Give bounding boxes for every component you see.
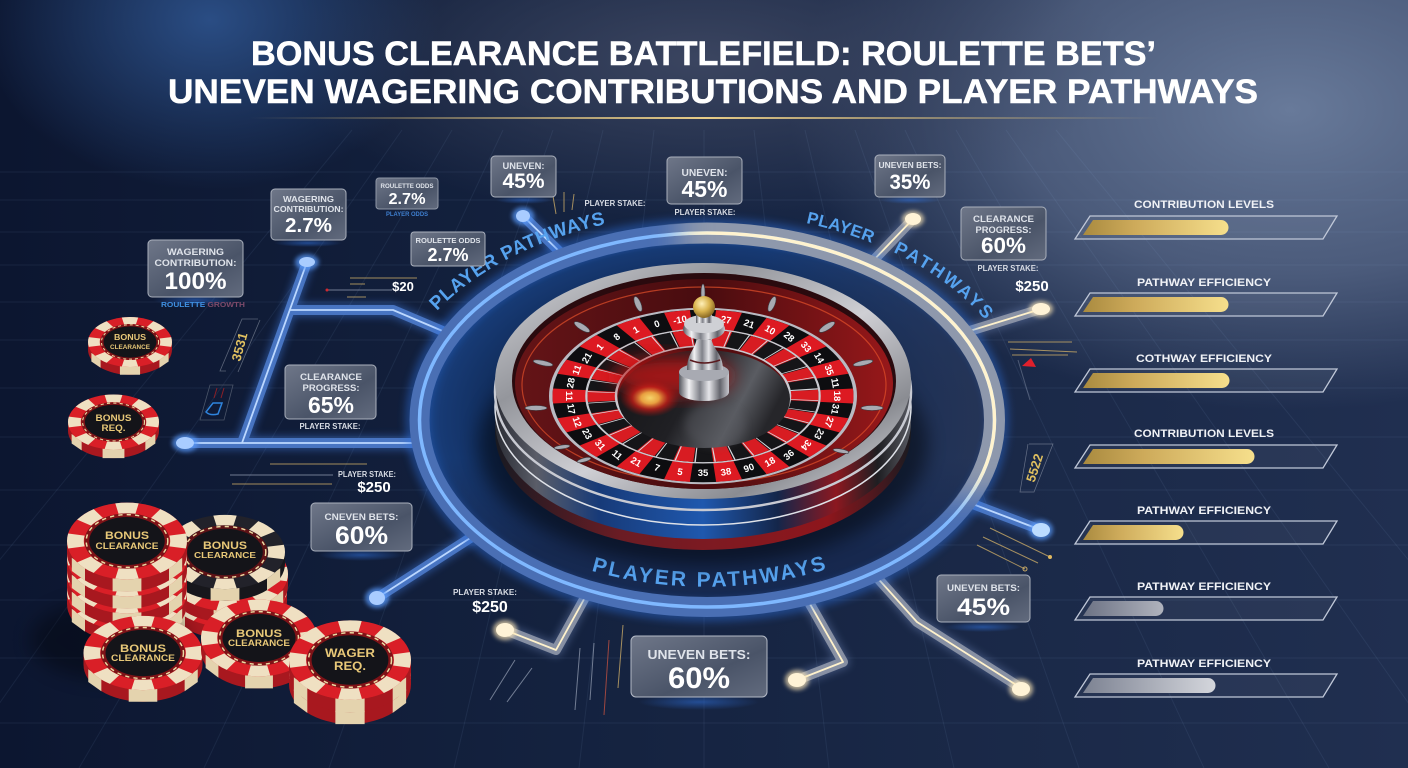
vertical figure 3531 [220,319,260,372]
wheel numbers: 18 [831,391,842,401]
panel: clearance progress 60%: 60% [981,233,1026,258]
bar: pathway efficiency 2 [1075,505,1337,544]
bar: contribution levels 2 [1075,428,1337,468]
panel: roulette odds 2.7%: 2.7% [428,245,468,265]
panel: roulette odds 2.7% [411,232,485,266]
wheel numbers: 34 [798,437,813,453]
connector node glows [172,207,1053,699]
panel: clearance progress 60%: PROGRESS: [976,225,1032,236]
panel: uneven bets 35% [875,155,945,204]
wheel numbers: 11 [609,448,625,463]
chip: wager req: WAGER [325,646,375,660]
wheel numbers: 18 [763,455,778,470]
label: player stake $250 right: $250 [1015,278,1049,295]
spindle [679,296,729,401]
label: player stake $250 left [338,470,396,496]
wheel numbers: 17 [564,403,577,415]
bar: pathway efficiency 1 [1075,277,1337,316]
chip stack: red: CLEARANCE [96,541,158,551]
bar: pathway efficiency 4 [1075,658,1337,697]
wheel numbers: 21 [742,317,756,332]
wheel numbers: 31 [828,403,841,416]
ring label: pathways upper right: PATHWAYS [894,242,992,318]
bowl ticks [525,284,883,464]
label: $20: $20 [392,279,414,294]
bar: pathway efficiency 3: PATHWAY EFFICIENCY [1137,581,1272,593]
wheel numbers: 38 [720,466,732,479]
panel: wagering contribution 100%: 100% [164,268,226,295]
label: player stake $250 right: PLAYER STAKE: [978,264,1038,273]
panel: wagering contribution 2.7% [271,189,346,247]
small chip: bonus req: REQ. [102,423,126,433]
bar: cothway efficiency [1075,353,1337,392]
panel: clearance progress 60% [961,207,1046,260]
glowing ball [620,379,680,417]
ring label: player pathways bottom: PLAYER PATHWAYS [592,556,825,587]
panel: uneven 45% [491,156,556,204]
title [168,35,1258,111]
label: player stake $250 bottom: PLAYER STAKE: [453,588,517,597]
panel: uneven bets 35%: 35% [890,171,931,194]
wheel numbers: 21 [580,350,595,366]
title: UNEVEN WAGERING CONTRIBUTIONS AND PLAYER PATHWAYS [168,73,1258,111]
number track [551,309,855,483]
panel: uneven bets 60% left: 60% [335,522,388,550]
label: player stake $250 bottom [453,588,517,616]
panel: uneven 45% centre: UNEVEN: [682,168,728,179]
blue and cream node dots [176,210,1050,696]
chip stack: black over red: BONUS [203,540,247,552]
bar: contribution levels 1: CONTRIBUTION LEVELS [1134,199,1274,211]
roulette wheel [478,263,928,565]
label: player stake $250 left: PLAYER STAKE: [338,470,396,479]
chip stack: red: BONUS [105,530,149,542]
label: player stake $250 left: $250 [357,479,391,496]
wheel numbers: 35 [698,468,709,479]
panel: clearance progress 65%: 65% [308,392,354,418]
wheel numbers: 35 [822,363,836,378]
panel: uneven bets 60% bottom [631,636,767,710]
panel: uneven bets 45% right [937,575,1030,632]
wheel numbers: 7 [652,462,661,475]
small chip: bonus req: BONUS [96,413,132,423]
panel: clearance progress 65% [285,365,376,419]
panel: uneven 45%: UNEVEN: [502,161,544,171]
panel: wagering contribution 100% [148,240,243,306]
label: player stake top: PLAYER STAKE: [584,199,646,208]
chip stack: black over red [164,514,289,639]
wheel base [495,274,911,550]
label: player stake $250 right [978,264,1049,295]
wheel numbers: 1 [631,324,642,337]
wheel numbers: 12 [570,415,584,429]
small blue and red icon [200,385,233,420]
chip: wager req: REQ. [334,659,366,673]
wheel numbers: 21 [628,455,644,470]
panel: uneven bets 60% left [311,503,412,561]
chip: wager req [288,620,412,724]
panel: uneven bets 60% left: CNEVEN BETS: [324,512,398,523]
panel: uneven bets 60% bottom: 60% [668,662,730,695]
panel: wagering contribution 100%: WAGERING [167,247,224,258]
bar: pathway efficiency 4: PATHWAY EFFICIENCY [1137,658,1272,670]
panel: clearance progress 65%: PROGRESS: [302,383,360,394]
panel: clearance progress 65%: CLEARANCE [300,372,362,383]
wheel numbers: 11 [828,377,841,390]
red marker [1022,358,1036,367]
bowl [512,273,896,489]
connector tubes: cream [505,219,1041,688]
decorative thin lines [230,192,1077,715]
panel: roulette odds 2.7%: ROULETTE ODDS [416,236,480,245]
vertical figure 5522 [1020,444,1053,492]
panel: uneven bets 45% right: UNEVEN BETS: [947,583,1020,594]
wheel numbers: 28 [781,330,796,345]
wheel centre cone [612,350,790,448]
chip: bonus clearance front left [83,615,203,702]
wheel numbers: 0 [653,318,662,331]
title: BONUS CLEARANCE BATTLEFIELD: ROULETTE BETS’ [251,35,1156,73]
small chip: bonus req [67,394,160,458]
wheel numbers: 10 [762,323,777,338]
panel: wagering contribution 2.7%: CONTRIBUTION: [274,204,344,214]
wheel numbers: 1 [594,341,607,353]
bar: contribution levels 1 [1075,199,1337,239]
wheel numbers: 90 [742,461,756,475]
chip stack: black over red: CLEARANCE [194,550,256,560]
wheel numbers: 8 [612,331,623,343]
wheel numbers: 5 [676,467,684,478]
chip: bonus clearance front left: BONUS [120,643,166,655]
wheel numbers: 31 [592,438,608,453]
bar: contribution levels 2: CONTRIBUTION LEVELS [1134,428,1274,440]
wheel numbers: 27 [720,314,732,327]
panel: wagering contribution 2.7%: WAGERING [283,194,334,204]
wheel numbers: 33 [798,340,813,355]
silver rim [495,263,911,499]
roulette caption: ROULETTE GROWTH [161,300,245,309]
wheel numbers: 14 [811,351,826,366]
label: player stake: PLAYER STAKE: [300,422,360,431]
bar: pathway efficiency 3 [1075,581,1337,620]
wheel numbers [563,314,842,479]
panel: uneven bets 60% bottom: UNEVEN BETS: [648,647,750,662]
chip: bonus clearance front left: CLEARANCE [111,653,175,663]
bar: pathway efficiency 1: PATHWAY EFFICIENCY [1137,277,1272,289]
small chip: bonus clearance: CLEARANCE [110,344,151,351]
connector tubes: blue [185,216,1041,598]
panel: wagering contribution 2.7%: 2.7% [285,215,332,237]
wheel numbers: 23 [811,426,826,441]
title divider [250,117,1160,119]
small chip: bonus clearance: BONUS [114,333,147,342]
chip: bonus clearance front centre [200,599,318,688]
vertical figure 5522: 5522 [1023,452,1046,484]
panel: small roulette odds 2.7%: 2.7% [388,191,426,208]
small blue caption: PLAYER ODDS [386,211,429,218]
vertical figure 3531: 3531 [229,331,251,363]
panel: uneven bets 35%: UNEVEN BETS: [878,160,942,170]
label: player stake $250 bottom: $250 [472,599,508,616]
bar: pathway efficiency 2: PATHWAY EFFICIENCY [1137,505,1272,517]
bar: cothway efficiency: COTHWAY EFFICIENCY [1136,353,1273,365]
wheel numbers: -10 [672,314,688,327]
wheel numbers: 23 [579,427,594,442]
wheel numbers: 11 [571,363,585,377]
pathway ring [416,229,998,611]
panel: uneven 45% centre: 45% [682,176,728,202]
wheel numbers: 27 [822,415,836,429]
panel: wagering contribution 100%: CONTRIBUTION: [154,258,236,269]
wheel numbers: 36 [782,448,797,463]
wheel numbers: 28 [565,377,578,389]
small chip: bonus clearance [88,317,172,375]
panel: uneven 45%: 45% [502,170,545,193]
chip stack: red [30,502,190,680]
panel: clearance progress 60%: CLEARANCE [973,214,1034,225]
label: player stake centre: PLAYER STAKE: [674,208,736,217]
wheel numbers: 11 [563,391,574,402]
chip: bonus clearance front centre: BONUS [236,628,282,640]
ring label: player pathways upper left: PLAYER PATHWAYS [428,212,604,310]
panel: small roulette odds 2.7% [376,178,438,209]
panel: small roulette odds 2.7%: ROULETTE ODDS [380,183,434,190]
panel: uneven bets 45% right: 45% [957,594,1010,621]
chip: bonus clearance front centre: CLEARANCE [228,638,290,648]
ring label: player upper right: PLAYER [807,212,874,243]
panel: uneven 45% centre [667,157,742,204]
